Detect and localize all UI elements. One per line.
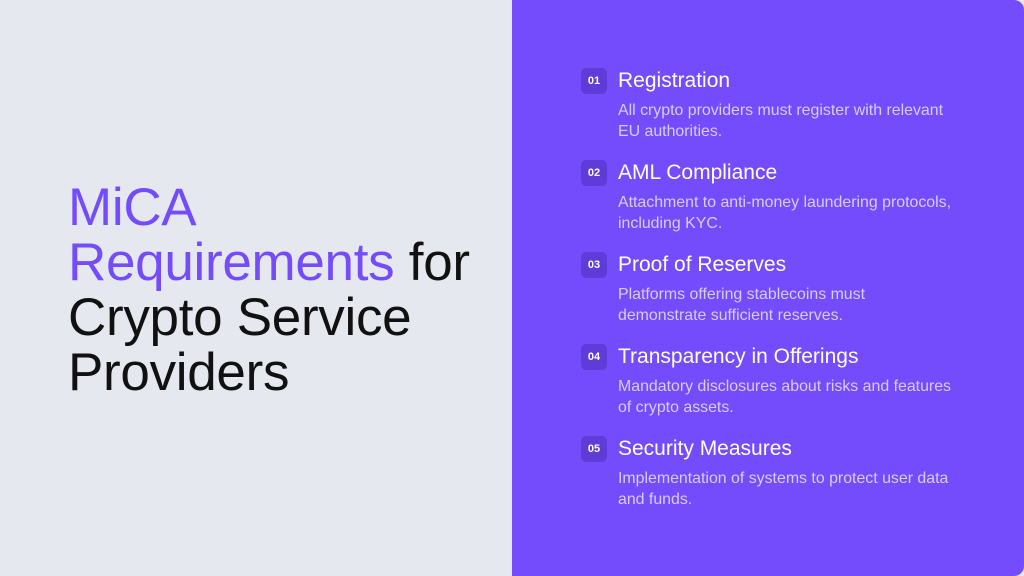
text: Mandatory disclosures about risks and features of crypto assets.: [618, 378, 951, 416]
text: 02: [588, 167, 600, 179]
title: Requirements for: [68, 233, 470, 292]
title: Providers: [68, 343, 289, 402]
text: AML Compliance: [618, 161, 777, 184]
text: 01: [588, 75, 600, 87]
title: [68, 178, 470, 402]
panel: right: [512, 0, 1024, 576]
text: Proof of Reserves: [618, 253, 786, 276]
text: 04: [588, 351, 600, 363]
text: Registration: [618, 69, 730, 92]
item 02: [581, 160, 951, 232]
item 03: [581, 252, 865, 324]
title: Crypto Service: [68, 288, 411, 347]
text: Implementation of systems to protect user data and funds.: [618, 470, 948, 508]
text: Attachment to anti-money laundering protocols, including KYC.: [618, 194, 951, 232]
text: 05: [588, 443, 600, 455]
item 01: [581, 68, 943, 140]
text: 03: [588, 259, 600, 271]
text: Security Measures: [618, 437, 792, 460]
text: Transparency in Offerings: [618, 345, 858, 368]
text: Platforms offering stablecoins must demonstrate sufficient reserves.: [618, 286, 865, 324]
item 04: [581, 344, 951, 416]
item 05: [581, 436, 948, 508]
text: All crypto providers must register with relevant EU authorities.: [618, 102, 943, 140]
title: MiCA: [68, 178, 196, 237]
